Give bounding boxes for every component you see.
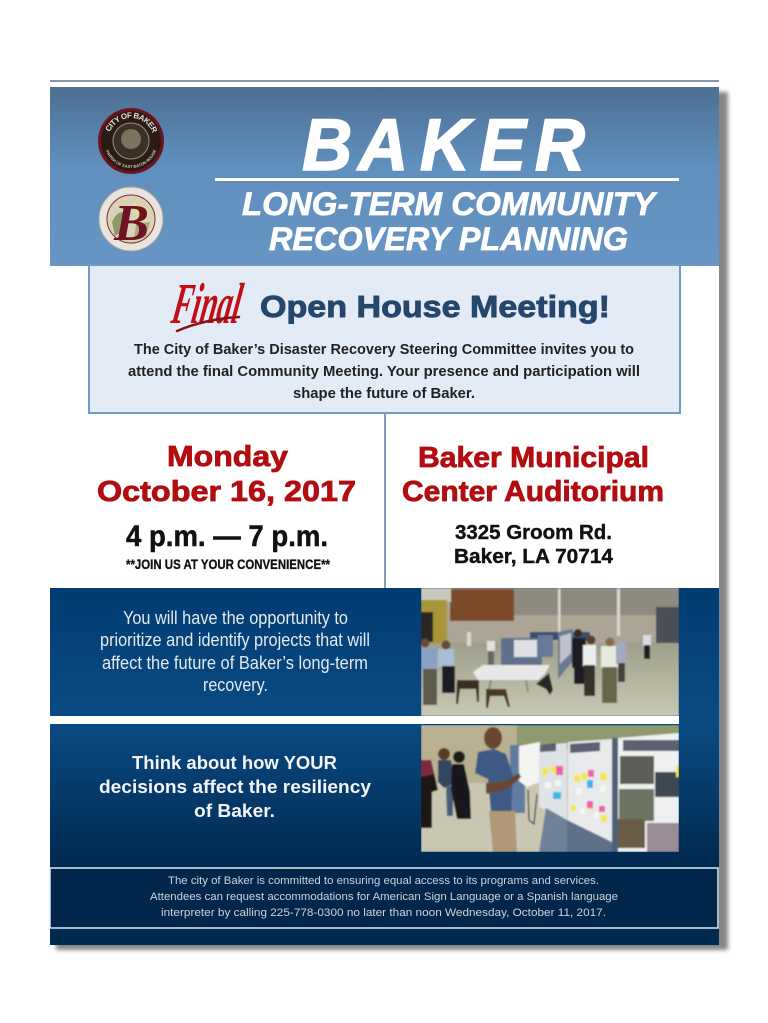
panel: location: 3325 Groom Rd. <box>455 522 612 544</box>
people <box>421 648 437 670</box>
footer: accessibility notice <box>50 866 719 945</box>
panel: date and time <box>97 441 356 572</box>
white separator <box>50 716 679 724</box>
title: BAKER <box>302 105 585 186</box>
opportunity text <box>100 608 370 695</box>
panel: location <box>402 442 664 568</box>
panel: location: Baker Municipal <box>418 442 649 474</box>
logo: City of Baker seal: PARISH OF EAST BATON ROUGE <box>106 150 156 168</box>
photo: reviewing boards <box>421 725 679 852</box>
page shadow <box>56 92 728 950</box>
opportunity text: recovery. <box>203 675 268 695</box>
invitation text: attend the final Community Meeting. Your presence and participation will <box>128 364 640 380</box>
table and chairs <box>473 665 550 680</box>
resiliency text: of Baker. <box>194 801 275 821</box>
panel: opportunity band <box>50 588 719 716</box>
logo: Baker B emblem: B <box>113 195 149 252</box>
resiliency text <box>99 753 371 821</box>
word: Final <box>167 271 247 336</box>
panel: date and time: **JOIN US AT YOUR CONVENIENCE** <box>126 557 331 572</box>
subtitle <box>242 186 658 257</box>
logo: City of Baker seal: CITY OF BAKER <box>106 112 157 134</box>
footer: accessibility notice: The city of Baker is committed to ensuring equal access to its programs and services. <box>168 875 599 887</box>
sticky notes <box>542 765 679 822</box>
footer: accessibility notice: Attendees can request accommodations for American Sign Language or a Spanish language <box>150 891 618 903</box>
header banner <box>50 87 719 266</box>
resiliency text: decisions affect the resiliency <box>99 777 371 797</box>
logo: City of Baker seal <box>98 108 164 174</box>
flyer background <box>50 87 719 945</box>
meeting heading: Open House Meeting! <box>260 289 610 324</box>
panel: date and time: 4 p.m. — 7 p.m. <box>126 520 328 553</box>
invitation text <box>128 342 640 402</box>
people <box>421 760 438 828</box>
opportunity text: You will have the opportunity to <box>123 608 348 628</box>
panel: resiliency band <box>50 716 719 866</box>
panel: invitation <box>89 265 680 413</box>
panel: location: Baker, LA 70714 <box>454 546 614 568</box>
logo: Baker B emblem <box>99 187 163 252</box>
footer: accessibility notice: interpreter by calling 225-778-0300 no later than noon Wednesday, October 11, 2017. <box>161 907 606 919</box>
word: Final: Final <box>167 271 247 336</box>
subtitle: RECOVERY PLANNING <box>269 221 628 257</box>
invitation text: shape the future of Baker. <box>293 386 475 402</box>
subtitle: LONG-TERM COMMUNITY <box>242 186 658 222</box>
board photos <box>620 756 654 784</box>
panel: date and time: October 16, 2017 <box>97 476 356 508</box>
photo: open house room <box>420 588 679 716</box>
invitation text: The City of Baker’s Disaster Recovery Steering Committee invites you to <box>134 342 634 358</box>
resiliency text: Think about how YOUR <box>132 753 337 773</box>
opportunity text: affect the future of Baker’s long-term <box>102 653 368 673</box>
panel: location: Center Auditorium <box>402 476 664 508</box>
opportunity text: prioritize and identify projects that will <box>100 630 370 650</box>
panel: date and time: Monday <box>167 441 288 473</box>
